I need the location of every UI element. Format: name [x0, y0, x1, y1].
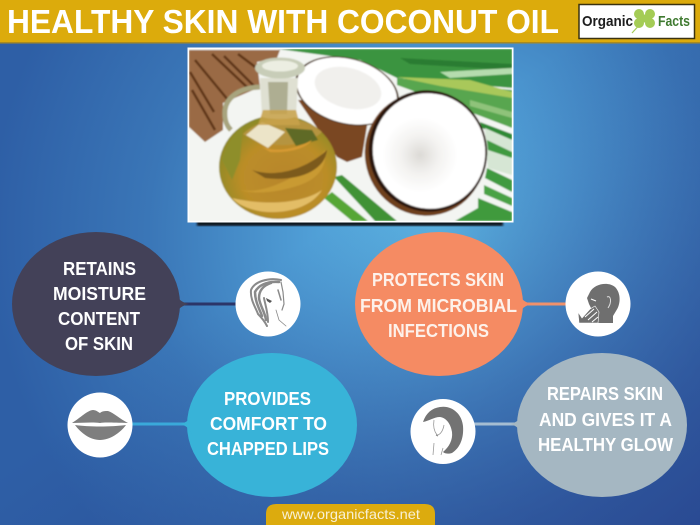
front coconut half: [364, 100, 476, 217]
palm fronds: [278, 49, 512, 88]
brown coconut husk: [189, 50, 280, 142]
connector: microbial: [515, 302, 570, 306]
logo: Organic Facts: [579, 4, 694, 38]
photo: coconut oil bottle and coconuts: [188, 45, 514, 233]
logo: Organic Facts: Facts: [658, 13, 690, 30]
bubble: repairs skin: HEALTHY GLOW: [538, 435, 673, 455]
bubble: protects skin: PROTECTS SKIN: [372, 270, 504, 290]
bubble: repairs skin: [510, 353, 687, 497]
bubble: retains moisture: RETAINS: [63, 259, 136, 279]
title banner: [0, 0, 700, 44]
bubble: chapped lips: CHAPPED LIPS: [207, 439, 329, 459]
bubble: chapped lips: [180, 353, 357, 497]
bubble: retains moisture: MOISTURE: [53, 284, 146, 304]
logo: Organic Facts: Organic: [582, 13, 633, 30]
bottle handle: [225, 87, 260, 130]
connector: moisture: [170, 302, 240, 306]
bubble: protects skin: INFECTIONS: [388, 321, 489, 341]
bottle neck: [260, 78, 298, 119]
icon: woman touching face: [236, 272, 300, 336]
rear coconut half: [298, 100, 368, 162]
bubble: retains moisture: [12, 232, 189, 376]
connector: lips: [130, 422, 195, 426]
bubble: protects skin: FROM MICROBIAL: [360, 296, 517, 316]
website footer badge: www.organicfacts.net: [281, 506, 420, 522]
bubble: retains moisture: CONTENT: [58, 309, 140, 329]
bubble: chapped lips: COMFORT TO: [210, 414, 327, 434]
connector: glow: [472, 422, 525, 426]
icon: lips: [68, 392, 132, 458]
title: HEALTHY SKIN WITH COCONUT OIL: [7, 3, 559, 40]
bubble: protects skin: [355, 232, 532, 376]
bubble: retains moisture: OF SKIN: [65, 334, 133, 354]
icon: woman with flowing hair: [410, 399, 476, 464]
bubble: repairs skin: REPAIRS SKIN: [547, 384, 663, 404]
bubble: chapped lips: PROVIDES: [224, 389, 311, 409]
bubble: repairs skin: AND GIVES IT A: [539, 410, 672, 430]
website footer badge: [266, 504, 435, 525]
bottle: [219, 115, 337, 219]
icon: person covering mouth: [566, 272, 630, 336]
